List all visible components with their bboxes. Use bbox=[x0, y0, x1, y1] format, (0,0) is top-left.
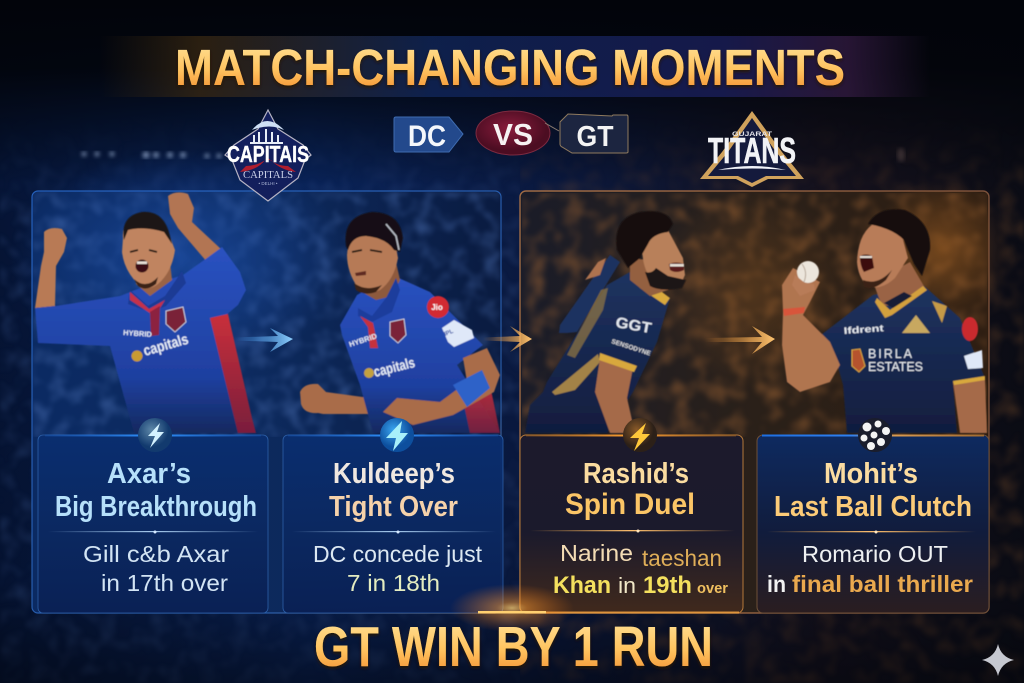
card: Mohit: Last Ball Clutch bbox=[774, 491, 972, 523]
heading: Axar’s bbox=[107, 458, 191, 490]
logo: Capitals: CAPITALS bbox=[243, 169, 293, 181]
card: Rashid: in bbox=[618, 573, 636, 598]
logo: Capitals: • DELHI • bbox=[259, 181, 278, 186]
card: Mohit bbox=[757, 434, 989, 613]
heading: Kuldeep’s bbox=[333, 458, 455, 490]
card: Axar bbox=[38, 434, 268, 613]
description: Romario OUT bbox=[802, 541, 948, 567]
card: Kuldeep bbox=[283, 434, 503, 613]
arrow: orange between panels bbox=[483, 326, 532, 352]
description: Gill c&b Axar bbox=[83, 541, 229, 567]
card: Rashid: over bbox=[697, 580, 728, 597]
arrow: blue bbox=[235, 328, 293, 352]
logo: Capitals bbox=[225, 110, 311, 201]
spark glow bbox=[450, 584, 574, 632]
jersey sponsor: Jio bbox=[431, 303, 443, 312]
logo: Titans: GUJARAT bbox=[732, 132, 772, 138]
card: Axar: in 17th over bbox=[101, 570, 228, 596]
player: Rashid bowling bbox=[525, 211, 686, 433]
player: Kuldeep running bbox=[300, 212, 500, 433]
logo wordmark: CAPITAIS bbox=[227, 141, 309, 167]
player: Kuldeep running: HYBRID bbox=[348, 331, 379, 349]
badge: DC: DC bbox=[408, 120, 446, 153]
badge: VS bbox=[476, 111, 550, 155]
card: Kuldeep: Tight Over bbox=[329, 491, 458, 523]
player: Kuldeep running: IPL bbox=[444, 329, 455, 338]
player: Axar celebrating bbox=[35, 192, 256, 433]
description: DC concede just bbox=[313, 541, 482, 567]
card: Rashid bbox=[520, 434, 743, 614]
jersey sponsor: GGT bbox=[614, 314, 653, 337]
heading: Mohit’s bbox=[824, 458, 918, 490]
title: MATCH-CHANGING MOMENTS bbox=[175, 39, 845, 96]
player: Mohit with ball: BIRLA bbox=[868, 347, 913, 361]
icon: lightning Kuldeep bbox=[380, 418, 414, 452]
player: Kuldeep running: capitals bbox=[372, 355, 417, 381]
card: Kuldeep: 7 in 18th bbox=[347, 570, 440, 596]
badge: VS: VS bbox=[493, 117, 533, 152]
icon: chequered ball Mohit bbox=[858, 418, 892, 452]
icon: sparkle watermark bbox=[982, 644, 1014, 676]
jersey sponsor: Ifdrent bbox=[843, 323, 885, 337]
panel: Delhi Capitals moments bbox=[10, 150, 501, 613]
icon: lightning Axar bbox=[138, 418, 172, 452]
logo: Titans bbox=[700, 111, 804, 187]
icon: lightning Rashid bbox=[623, 418, 657, 452]
description: Narine bbox=[560, 540, 633, 566]
player: Mohit with ball bbox=[782, 209, 987, 433]
card: Rashid: 19th bbox=[643, 572, 692, 599]
arrow: orange right bbox=[705, 326, 775, 354]
card: Rashid: taeshan bbox=[642, 545, 722, 571]
jersey sponsor: capitals bbox=[141, 331, 190, 360]
player: Mohit with ball: ESTATES bbox=[868, 360, 923, 374]
card: Mohit: final ball thriller bbox=[792, 571, 973, 597]
title banner bbox=[100, 36, 930, 97]
card: Axar: Big Breakthrough bbox=[55, 491, 257, 523]
card: Mohit: in bbox=[767, 571, 786, 597]
badge: DC bbox=[394, 117, 463, 153]
logo wordmark: TITANS bbox=[708, 130, 796, 171]
player: Rashid bowling: SENSODYNE bbox=[610, 338, 652, 358]
player: Axar celebrating: HYBRID bbox=[123, 328, 153, 339]
badge: GT bbox=[545, 114, 628, 153]
card: Rashid: Khan bbox=[553, 572, 611, 599]
panel: Gujarat Titans moments bbox=[520, 180, 1010, 613]
badge: GT: GT bbox=[576, 121, 614, 153]
card: Rashid: Spin Duel bbox=[565, 488, 695, 521]
heading: Rashid’s bbox=[583, 458, 689, 490]
result headline: GT WIN BY 1 RUN bbox=[314, 615, 713, 679]
